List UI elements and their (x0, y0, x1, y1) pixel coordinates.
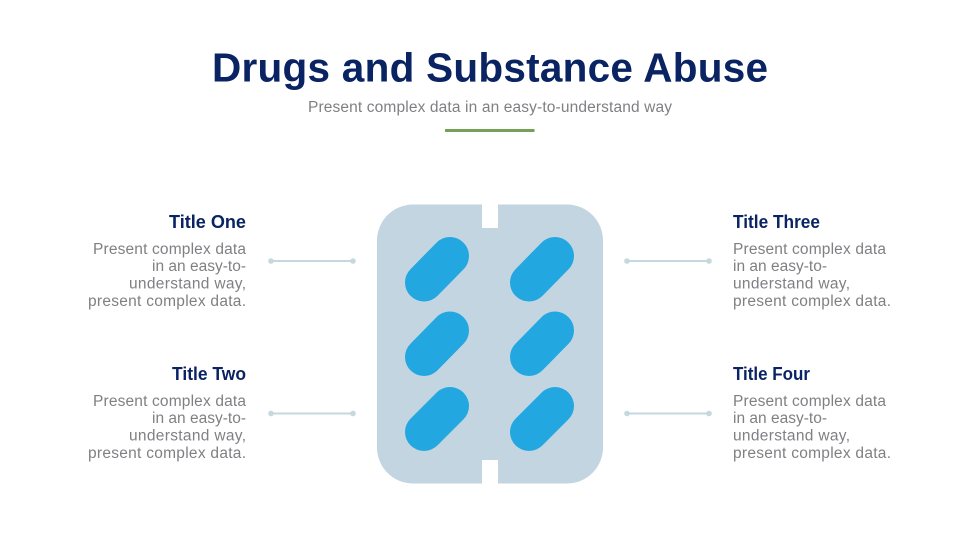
text block: Title Two (88, 363, 246, 462)
icon: blister pack of pills (377, 204, 603, 484)
text block: Title Three: Present complex data (733, 241, 886, 258)
connector: Title Two (268, 411, 356, 416)
subtitle: Present complex data in an easy-to-understand way (308, 99, 672, 116)
connector: Title One (268, 258, 356, 264)
text block: Title One (88, 211, 246, 310)
blister card (377, 204, 603, 484)
text block: Title Three (733, 211, 891, 310)
text block: Title Three: present complex data. (733, 293, 891, 310)
text block: Title Two: Present complex data (93, 393, 246, 410)
text block: Title Two: Title Two (172, 363, 246, 384)
text block: Title Two: present complex data. (88, 445, 246, 462)
title: Drugs and Substance Abuse (212, 44, 768, 90)
text block: Title Four: understand way, (733, 428, 850, 444)
text block: Title Three: Title Three (733, 211, 820, 232)
text block: Title Four: Title Four (733, 363, 810, 384)
title underline accent (445, 129, 534, 132)
text block: Title Four (733, 363, 891, 462)
text block: Title One: understand way, (129, 276, 246, 292)
connector: Title Four (624, 411, 712, 416)
text block: Title Two: in an easy-to- (152, 410, 246, 427)
connector: Title Three (624, 258, 712, 264)
text block: Title Four: present complex data. (733, 445, 891, 462)
text block: Title One: present complex data. (88, 293, 246, 310)
text block: Title Two: understand way, (129, 428, 246, 444)
text block: Title Four: in an easy-to- (733, 410, 827, 427)
pills (424, 256, 555, 432)
text block: Title One: Title One (169, 211, 246, 232)
text block: Title One: in an easy-to- (152, 258, 246, 275)
text block: Title One: Present complex data (93, 241, 246, 258)
text block: Title Three: understand way, (733, 276, 850, 292)
text block: Title Three: in an easy-to- (733, 258, 827, 275)
text block: Title Four: Present complex data (733, 393, 886, 410)
